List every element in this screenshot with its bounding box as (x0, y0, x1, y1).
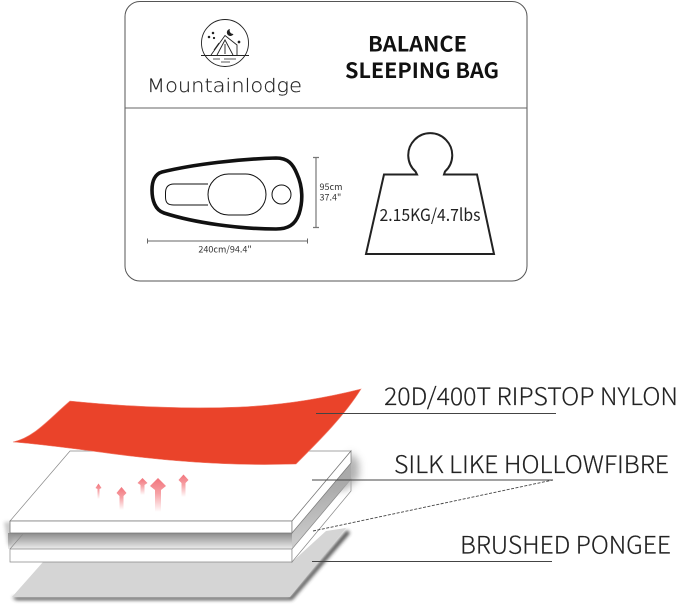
upper layer: hollowfibre (10, 451, 359, 533)
top layer: ripstop nylon (13, 389, 361, 465)
icon: sleeping bag outline (152, 158, 302, 229)
panel: product specifications (125, 2, 527, 281)
label: brushed pongee: BRUSHED PONGEE (460, 526, 671, 560)
middle layer: hollowfibre lower (4, 463, 351, 562)
title (345, 28, 499, 85)
icon: weight: 2.15KG/4.7lbs (380, 201, 481, 226)
title: SLEEPING BAG (345, 55, 499, 85)
icon: weight (366, 133, 494, 254)
height dimension: 95cm (320, 180, 342, 193)
label: 20D/400T ripstop nylon: 20D/400T RIPSTOP NYLON (384, 377, 678, 412)
height dimension: 37.4" (320, 190, 341, 204)
bottom layer: brushed pongee (12, 528, 350, 600)
label: silk like hollowfibre: SILK LIKE HOLLOWFIBRE (394, 445, 669, 480)
width dimension (148, 238, 308, 256)
height dimension (313, 158, 342, 228)
width dimension: 240cm/94.4" (198, 242, 252, 256)
leader lines (312, 414, 556, 562)
heat arrows (96, 474, 188, 512)
icon: Mountainlodge tent logo (201, 20, 249, 66)
logo wordmark: Mountainlodge (147, 75, 302, 97)
title: BALANCE (368, 28, 467, 58)
diagram: material layers (4, 389, 361, 600)
